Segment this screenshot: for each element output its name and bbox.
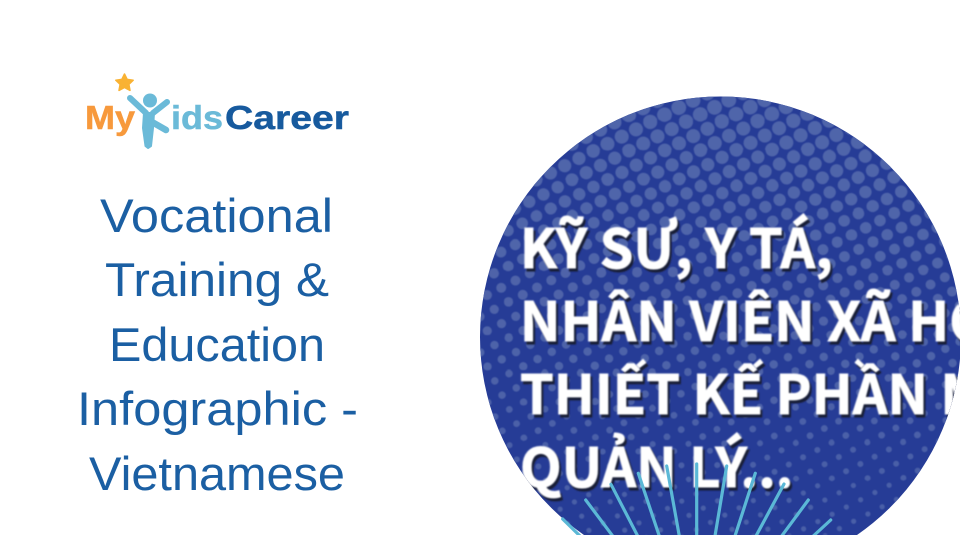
icon: star [116,74,133,90]
halftone dots [479,90,960,535]
circle heading text shadow [522,208,960,506]
title [77,189,358,500]
title line 1: Vocational [100,189,333,242]
title line 5: Vietnamese [89,447,345,500]
circle heading text: QUẢN LÝ... [520,424,794,503]
circle background [479,96,960,535]
circle heading text [520,205,960,503]
circle heading text shadow: KỸ SƯ, Y TÁ, [522,208,835,287]
title line 2: Training & [105,253,329,306]
title line 4: Infographic - [77,382,358,435]
logo word: My: My [85,99,136,136]
panel: blue halftone circle [479,90,960,535]
logo word: Career: Career [225,99,349,136]
circle heading text: KỸ SƯ, Y TÁ, [520,205,833,284]
rays [563,464,831,535]
logo word: ids: ids [171,99,223,136]
circle heading text shadow: QUẢN LÝ... [522,427,796,506]
logo: MyKidsCareer [85,74,349,148]
icon: jumping child forming the K [130,94,167,148]
title line 3: Education [109,318,325,371]
